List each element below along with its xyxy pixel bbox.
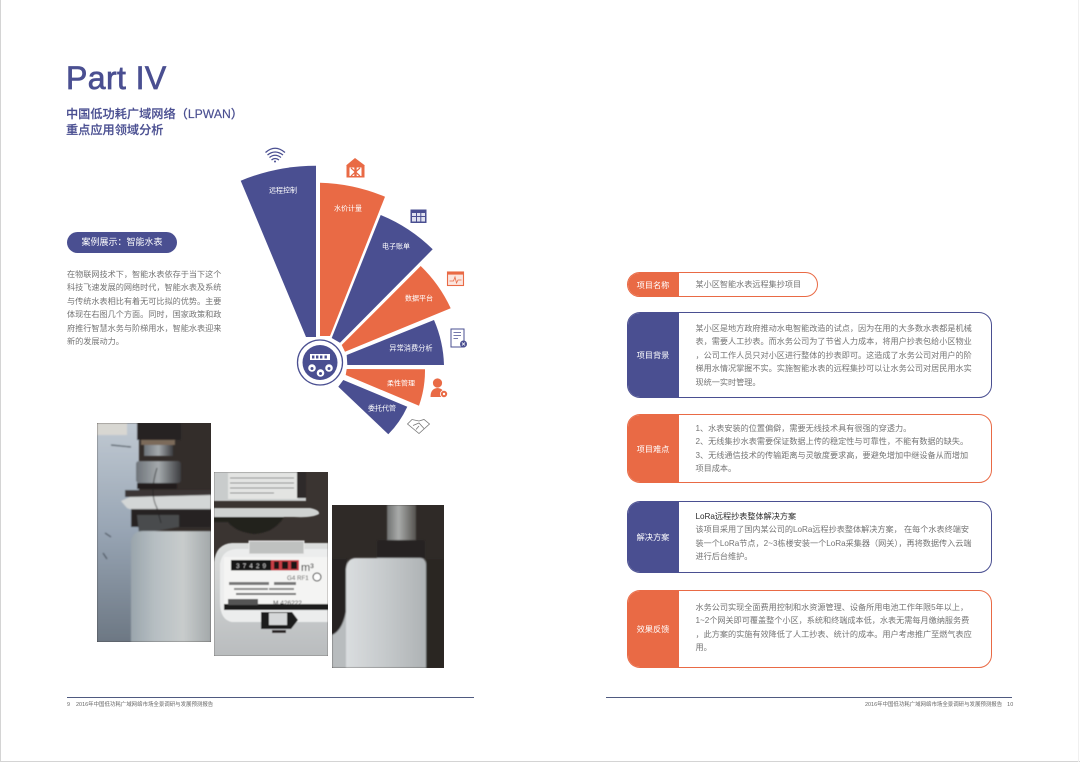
icon: document error [451, 329, 467, 348]
photo: meter display [214, 472, 328, 656]
icon: data chart [448, 272, 464, 286]
footer left: 9 2016年中国低功耗广域网络市场全景调研与发展预测报告 [67, 702, 213, 708]
label: background [627, 312, 679, 398]
photo: meter display: 37429 [236, 563, 269, 570]
wedge: 电子账单: 电子账单 [382, 242, 410, 250]
label: project name [627, 272, 679, 297]
wedge: 柔性管理: 柔性管理 [387, 378, 415, 388]
intro text: 府推行智慧水务与阶梯用水，智能水表迎来 [67, 324, 221, 333]
text: solution: LoRa远程抄表整体解决方案 [696, 512, 796, 520]
wedge: 委托代管 [338, 380, 407, 434]
text: difficulties: 2、无线集抄水表需要保证数据上传的稳定性与可靠性，不能有数据的缺失。 [696, 437, 968, 446]
text: background: ，公司工作人员只对小区进行整体的抄表即可。这造成了水务公司对用户的阶 [696, 351, 972, 360]
photo: meter display: M 426222 [273, 600, 302, 607]
icon: handshake [408, 420, 430, 434]
wedge: 数据平台: 数据平台 [405, 294, 433, 302]
label: background: 项目背景 [637, 351, 669, 360]
text: difficulties: 3、无线通信技术的传输距离与灵敏度要求高，要避免增加中继设备从而增加 [696, 451, 968, 460]
photo: meter body [332, 505, 444, 668]
panel: difficulties [627, 414, 992, 483]
label: project name: 项目名称 [637, 280, 669, 290]
text: feedback [696, 602, 972, 652]
text: background: 梯用水情况掌握不实。实施智能水表的远程集抄可以让水务公司对居民用水实 [696, 364, 972, 373]
wedge: 异常消费分析: 异常消费分析 [389, 344, 433, 352]
icon: bank building [346, 158, 365, 178]
wedge: 水价计量: 水价计量 [334, 204, 362, 212]
label: solution [627, 501, 679, 573]
wedge: 电子账单 [332, 215, 433, 343]
intro text: 新的发展动力。 [67, 337, 124, 346]
text: feedback: 水务公司实现全面费用控制和水资源管理、设备所用电池工作年限5年以上， [696, 602, 968, 612]
photo: meter display: m³ [301, 562, 314, 574]
case badge [67, 232, 177, 253]
text: background: 表，需要人工抄表。而水务公司为了节省人力成本，将用户抄表包给小区物业 [696, 337, 972, 346]
text: background: 某小区是地方政府推动水电智能改造的试点，因为在用的大多数水表都是机械 [696, 324, 972, 332]
text: feedback: 1~2个网关即可覆盖整个小区，系统和终端成本低，水表无需每月缴纳服务费 [696, 616, 969, 625]
wedge: 水价计量 [320, 183, 385, 336]
intro text: 在物联网技术下，智能水表依存于当下这个 [67, 270, 221, 278]
panel: feedback [627, 590, 992, 668]
text: feedback: ，此方案的实施有效降低了人工抄表、统计的成本。用户考虑推广至燃气表应 [696, 630, 972, 639]
icon: wifi [266, 148, 285, 162]
intro text: 与传统水表相比有着无可比拟的优势。主要 [67, 297, 221, 306]
icon: water meter [298, 340, 342, 385]
text: difficulties: 项目成本。 [696, 464, 736, 473]
label: difficulties: 项目难点 [637, 444, 669, 454]
label: difficulties [627, 414, 679, 483]
label: solution: 解决方案 [637, 533, 669, 542]
text: difficulties [696, 424, 968, 473]
text: solution [696, 512, 972, 561]
text: solution: 进行后台维护。 [696, 552, 752, 561]
wedge: 数据平台 [342, 266, 451, 352]
label: feedback: 效果反馈 [637, 625, 669, 634]
text: background [696, 324, 972, 387]
text: difficulties: 1、水表安装的位置偏僻，需要无线技术具有很强的穿透力。 [696, 424, 911, 432]
subtitle: 重点应用领域分析 [66, 123, 164, 137]
subtitle [66, 107, 243, 137]
photo: meter pipe [97, 423, 211, 642]
panel: project name [627, 272, 818, 297]
intro text: 体现在右图几个方面。同时，国家政策和政 [67, 310, 221, 319]
wedge: 异常消费分析 [347, 320, 444, 365]
subtitle: 中国低功耗广域网络（LPWAN） [66, 107, 243, 121]
wedge: 远程控制 [241, 166, 316, 337]
wedge: 远程控制: 远程控制 [269, 186, 297, 194]
label: feedback [627, 590, 679, 668]
text: feedback: 用。 [696, 643, 712, 652]
text: solution: 装一个LoRa节点，2~3栋楼安装一个LoRa采集器（网关），再将数据传入云端 [696, 539, 972, 548]
intro text [67, 270, 222, 346]
wedge: 委托代管: 委托代管 [368, 404, 396, 412]
photo: meter display: G4 RF1 [287, 575, 309, 582]
panel: background [627, 312, 992, 398]
title: Part IV [66, 60, 167, 96]
text: background: 现统一实时管理。 [696, 378, 761, 387]
text: solution: 该项目采用了国内某公司的LoRa远程抄表整体解决方案， 在每个水表终端安 [696, 525, 969, 534]
wedge: 柔性管理 [346, 369, 425, 406]
icon: table [410, 210, 426, 223]
panel: solution [627, 501, 992, 573]
footer right: 2016年中国低功耗广域网络市场全景调研与发展预测报告 10 [865, 702, 1013, 708]
case badge: 案例展示：智能水表 [81, 237, 162, 247]
text: project name: 某小区智能水表远程集抄项目 [696, 280, 801, 289]
fan chart [240, 148, 467, 434]
intro text: 科技飞速发展的网络时代，智能水表及系统 [67, 283, 221, 292]
icon: person [430, 378, 448, 398]
